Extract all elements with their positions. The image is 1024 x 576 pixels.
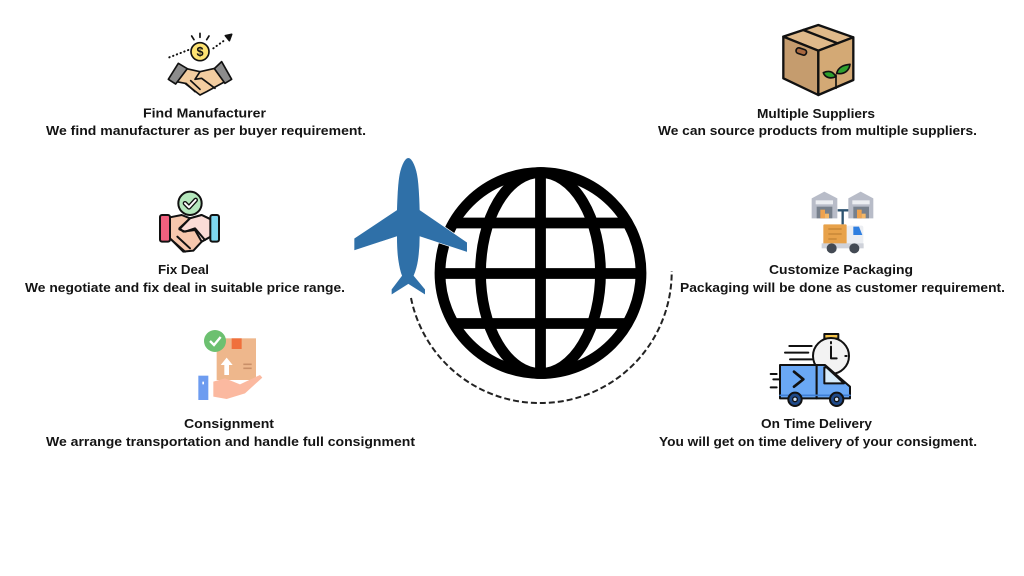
- icon: hand holding parcel: [198, 330, 262, 400]
- panel: consignment: [46, 330, 416, 449]
- icon: handshake with dollar coin: [168, 33, 232, 95]
- icon: handshake with check mark: [160, 192, 219, 252]
- icon: handshake with dollar coin: $: [196, 45, 204, 59]
- description: consignment: We arrange transportation and handle full consignment: [46, 435, 416, 449]
- description: fix deal: We negotiate and fix deal in suitable price range.: [25, 281, 345, 295]
- heading: consignment: Consignment: [184, 417, 275, 431]
- heading: find manufacturer: Find Manufacturer: [143, 106, 266, 120]
- panel: find manufacturer: [46, 33, 366, 138]
- panel: on time delivery: [659, 334, 977, 449]
- airplane: [354, 158, 467, 295]
- globe: [437, 170, 644, 376]
- description: on time delivery: You will get on time delivery of your consigment.: [659, 435, 977, 449]
- icon: delivery truck with clock: [771, 334, 850, 406]
- description: customize packaging: Packaging will be done as customer requirement.: [680, 281, 1005, 295]
- heading: multiple suppliers: Multiple Suppliers: [757, 107, 875, 121]
- icon: cardboard box with sprout: [783, 25, 853, 95]
- heading: fix deal: Fix Deal: [158, 263, 209, 277]
- dashed flight path: [411, 271, 672, 403]
- panel: multiple suppliers: [658, 25, 977, 138]
- description: find manufacturer: We find manufacturer as per buyer requirement.: [46, 124, 366, 138]
- panel: fix deal: [25, 192, 345, 295]
- icon: warehouses and delivery truck: [812, 192, 873, 253]
- panel: customize packaging: [680, 192, 1005, 295]
- heading: customize packaging: Customize Packaging: [769, 263, 913, 277]
- heading: on time delivery: On Time Delivery: [761, 417, 872, 431]
- description: multiple suppliers: We can source products from multiple suppliers.: [658, 124, 977, 138]
- icon: airplane and globe with dashed flight path: [354, 158, 672, 403]
